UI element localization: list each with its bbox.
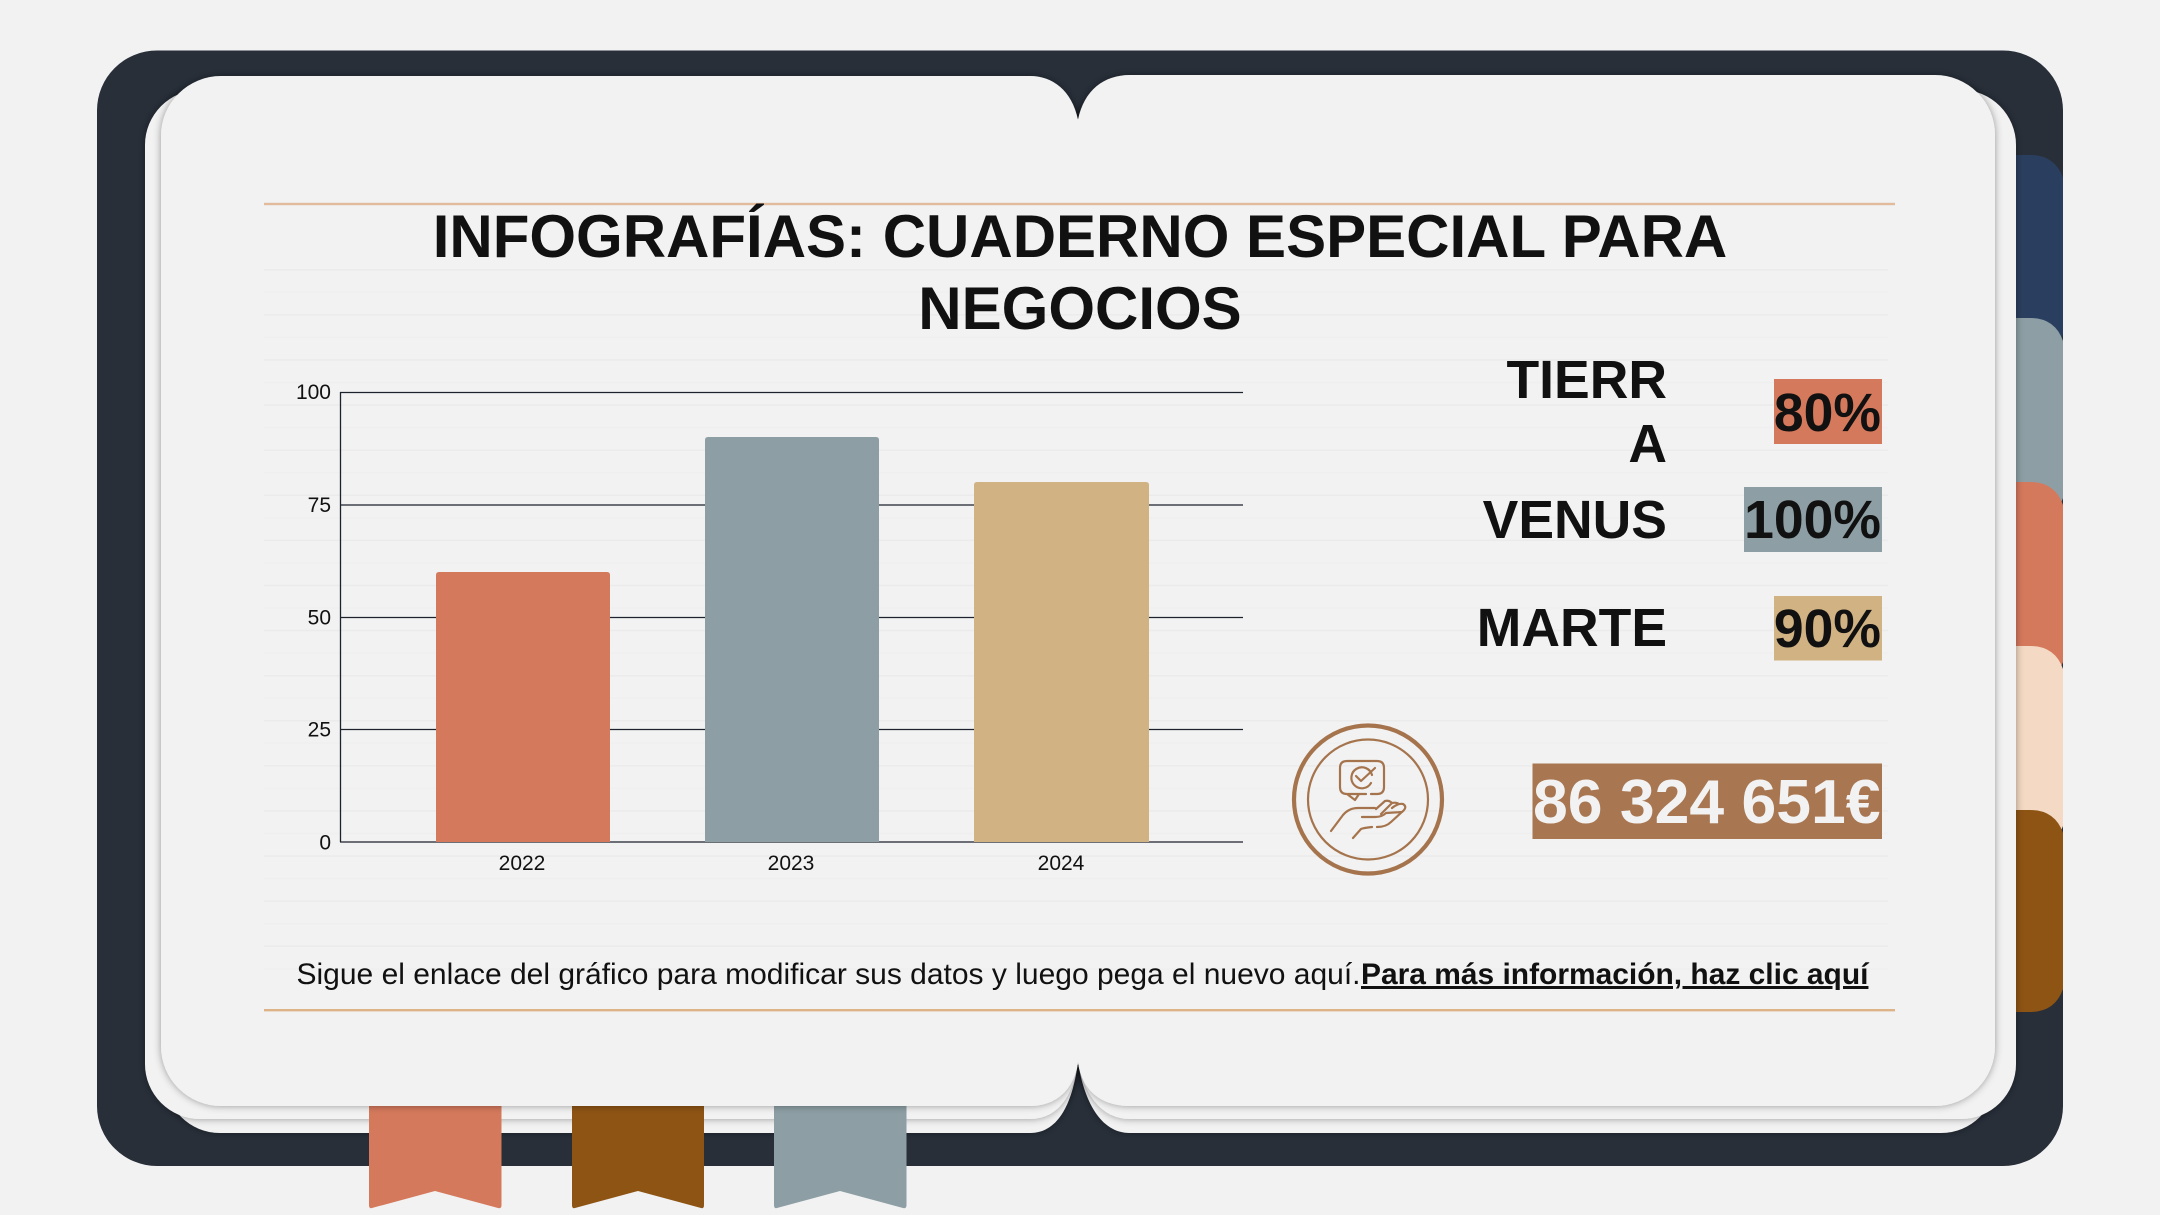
stat: Marte 90%: 90% — [1774, 600, 1881, 659]
stat: Marte 90%: MARTE — [1477, 599, 1667, 658]
tab: coral — [2000, 482, 2063, 685]
y axis labels — [296, 381, 331, 854]
x axis labels: 2022 — [499, 852, 545, 875]
y axis labels: 0 — [319, 832, 331, 854]
stat: Tierra 80%: TIERR — [1506, 351, 1667, 410]
stat: Venus 100% — [1483, 487, 1882, 552]
bookmarks — [369, 1100, 906, 1208]
bookmark: coral — [369, 1100, 502, 1208]
y axis labels: 50 — [308, 606, 331, 630]
tab: brown — [2000, 810, 2063, 1012]
stat: Marte 90% — [1477, 596, 1882, 660]
bookmark: grey — [774, 1100, 906, 1208]
bar: 2022 — [436, 572, 610, 842]
bookmark: brown — [572, 1100, 704, 1208]
front page — [161, 75, 1995, 1106]
y axis labels: 25 — [308, 718, 331, 742]
stat: Tierra 80%: 80% — [1774, 384, 1881, 443]
footer note — [296, 958, 1870, 991]
middle page — [145, 90, 2016, 1119]
title: NEGOCIOS — [918, 275, 1242, 342]
x axis labels — [499, 852, 1085, 875]
x axis labels: 2024 — [1038, 852, 1085, 875]
side tabs — [2000, 155, 2063, 1012]
back page stack — [165, 100, 1996, 1133]
stat: Venus 100%: VENUS — [1483, 491, 1667, 550]
y axis labels: 100 — [296, 381, 331, 404]
bar: 2024 — [974, 482, 1149, 842]
tab: navy — [2000, 155, 2063, 357]
tab: peach — [2000, 646, 2063, 849]
stat: Tierra 80% — [1506, 351, 1882, 474]
bar chart — [296, 381, 1243, 875]
stat: Venus 100%: 100% — [1744, 491, 1881, 550]
footer note: Para más información, haz clic aquí — [1361, 958, 1870, 991]
footer note: Sigue el enlace del gráfico para modificar sus datos y luego pega el nuevo aquí. — [296, 958, 1361, 991]
stat: Tierra 80%: A — [1628, 415, 1667, 474]
title — [433, 203, 1727, 342]
icon: hand with speech bubble in circle — [1294, 726, 1442, 874]
title: INFOGRAFÍAS: CUADERNO ESPECIAL PARA — [433, 203, 1727, 270]
x axis labels: 2023 — [768, 852, 814, 875]
total amount: 86 324 651€ — [1533, 767, 1881, 837]
bar: 2023 — [705, 437, 879, 842]
y axis labels: 75 — [308, 494, 331, 517]
tab: grey blue — [2000, 318, 2063, 521]
